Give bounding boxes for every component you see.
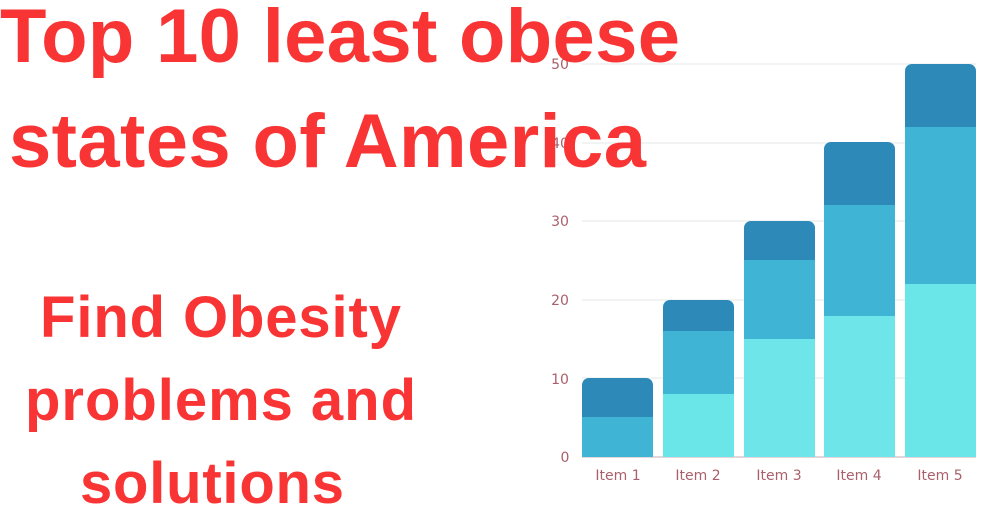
y axis labels: 50 [551, 57, 569, 73]
x axis labels [595, 468, 963, 484]
x axis labels: Item 1 [595, 468, 641, 484]
bar: Item 1 [582, 378, 653, 457]
subtitle: solutions [80, 451, 344, 516]
y axis labels: 20 [551, 293, 569, 309]
bar: Item 5 [905, 64, 976, 457]
stacked bar chart [551, 57, 976, 484]
subtitle: Find Obesity [40, 285, 401, 350]
bar: Item 4 [824, 142, 895, 457]
y axis labels [551, 57, 569, 466]
bar: Item 3 [744, 221, 815, 457]
x axis labels: Item 2 [675, 468, 721, 484]
x axis labels: Item 3 [756, 468, 802, 484]
y axis labels: 30 [551, 214, 569, 230]
x axis labels: Item 5 [917, 468, 963, 484]
subtitle: problems and [25, 368, 416, 433]
title: states of America [9, 99, 647, 184]
y axis labels: 10 [551, 372, 569, 388]
title [0, 0, 680, 184]
x axis labels: Item 4 [836, 468, 882, 484]
subtitle [25, 285, 416, 516]
y axis labels: 40 [551, 136, 569, 152]
bar: Item 2 [663, 300, 734, 457]
y axis labels: 0 [561, 450, 569, 466]
